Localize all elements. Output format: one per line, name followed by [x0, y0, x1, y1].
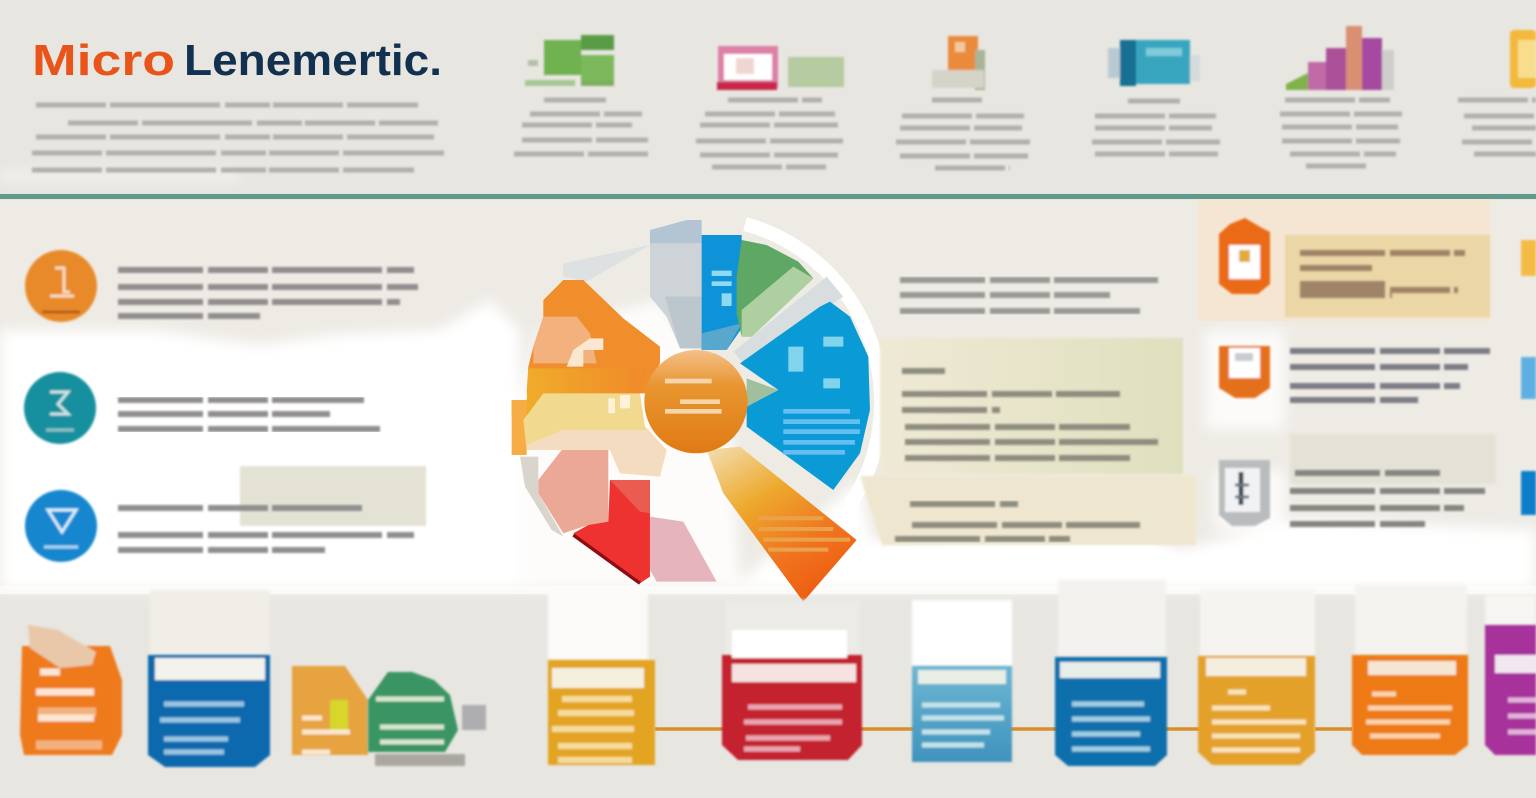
light blue diagonal wedge [733, 277, 843, 363]
text: highlight 2 [1290, 351, 1490, 400]
light gray back wedge [563, 245, 650, 282]
green wedge [737, 240, 813, 337]
icon: orange badge 2 [1219, 346, 1270, 398]
text: column 6 [1458, 100, 1536, 154]
bottom card 5: yellow [548, 660, 655, 765]
text: column 1 [514, 100, 648, 154]
gray top wedge [650, 220, 702, 243]
blue wedge [702, 235, 742, 350]
bottom card 10: orange [1352, 655, 1468, 755]
panel: left list [24, 222, 426, 562]
title: Lenemertic. [184, 36, 442, 85]
text: column 3 [896, 100, 1030, 168]
red wedge [573, 480, 650, 583]
bottom card 8: dark blue [1055, 657, 1167, 766]
icon: orange badge 1 [1219, 218, 1270, 294]
icon: green blocks, column 1 [525, 35, 614, 86]
connector line [655, 727, 1352, 731]
bottom orange wedge [707, 447, 857, 602]
highlight 3 background [1290, 434, 1496, 484]
text: column 4 [1092, 101, 1220, 154]
right edge cut-off cards [1521, 240, 1536, 515]
small list heading [58, 220, 140, 224]
center hub [644, 350, 748, 453]
pink wedge [650, 517, 717, 582]
left orange bar [512, 400, 527, 455]
white haze bands [0, 172, 1536, 590]
icon: gray badge 3 [1219, 460, 1270, 526]
icon: teal panel, column 4 [1108, 40, 1200, 86]
panel: middle note [880, 338, 1183, 474]
salmon wedge [538, 450, 608, 533]
panel: right highlights [1198, 199, 1496, 526]
panel: lower note [860, 476, 1196, 545]
text: highlight 3 [1290, 473, 1485, 524]
text: item 3 [118, 508, 414, 550]
bottom card 9: golden [1198, 656, 1315, 765]
icon: shield badge [25, 490, 97, 562]
text: note [902, 371, 1158, 458]
highlight background [1198, 199, 1490, 321]
icon: pink monitor, column 2 [717, 46, 844, 90]
icon: bar chart, column 5 [1286, 26, 1394, 90]
text: item 1 [118, 270, 418, 316]
big blue wedge [740, 302, 870, 490]
title [32, 36, 442, 85]
title: Micro [32, 36, 175, 85]
highlight inner box [1285, 235, 1490, 317]
pale yellow wedge [523, 393, 667, 477]
yellow band [512, 368, 647, 417]
pie chart [512, 220, 870, 602]
card columns, translucent tops [150, 580, 1536, 666]
divider line [0, 194, 1536, 199]
icon: yellow cut-off, column 6 [1510, 30, 1536, 88]
text: lower note [895, 504, 1140, 539]
text: item 2 [118, 400, 380, 429]
icon: number 3 badge [24, 372, 96, 444]
lower section background [0, 200, 1536, 595]
bottom card 1: orange [20, 625, 122, 755]
icon: number 1 badge [25, 250, 97, 322]
text: column 5 [1280, 100, 1402, 166]
bottom card 2: blue [148, 655, 270, 767]
panel: item 3 background [240, 466, 426, 526]
bottom card 6: red [722, 630, 862, 760]
intro text block [32, 105, 444, 170]
text: highlight 1 [1300, 253, 1465, 295]
bottom card 3: small orange [292, 666, 368, 755]
upper orange wedge [527, 280, 660, 393]
text: right of pie [900, 280, 1158, 311]
pie outer white arc [745, 224, 881, 505]
bottom card 11: purple cut-off [1485, 625, 1536, 755]
icon: orange document, column 3 [932, 36, 985, 90]
bottom card 7: light blue [912, 666, 1012, 762]
bottom card 4: green [368, 672, 486, 760]
text: column 2 [696, 100, 843, 167]
